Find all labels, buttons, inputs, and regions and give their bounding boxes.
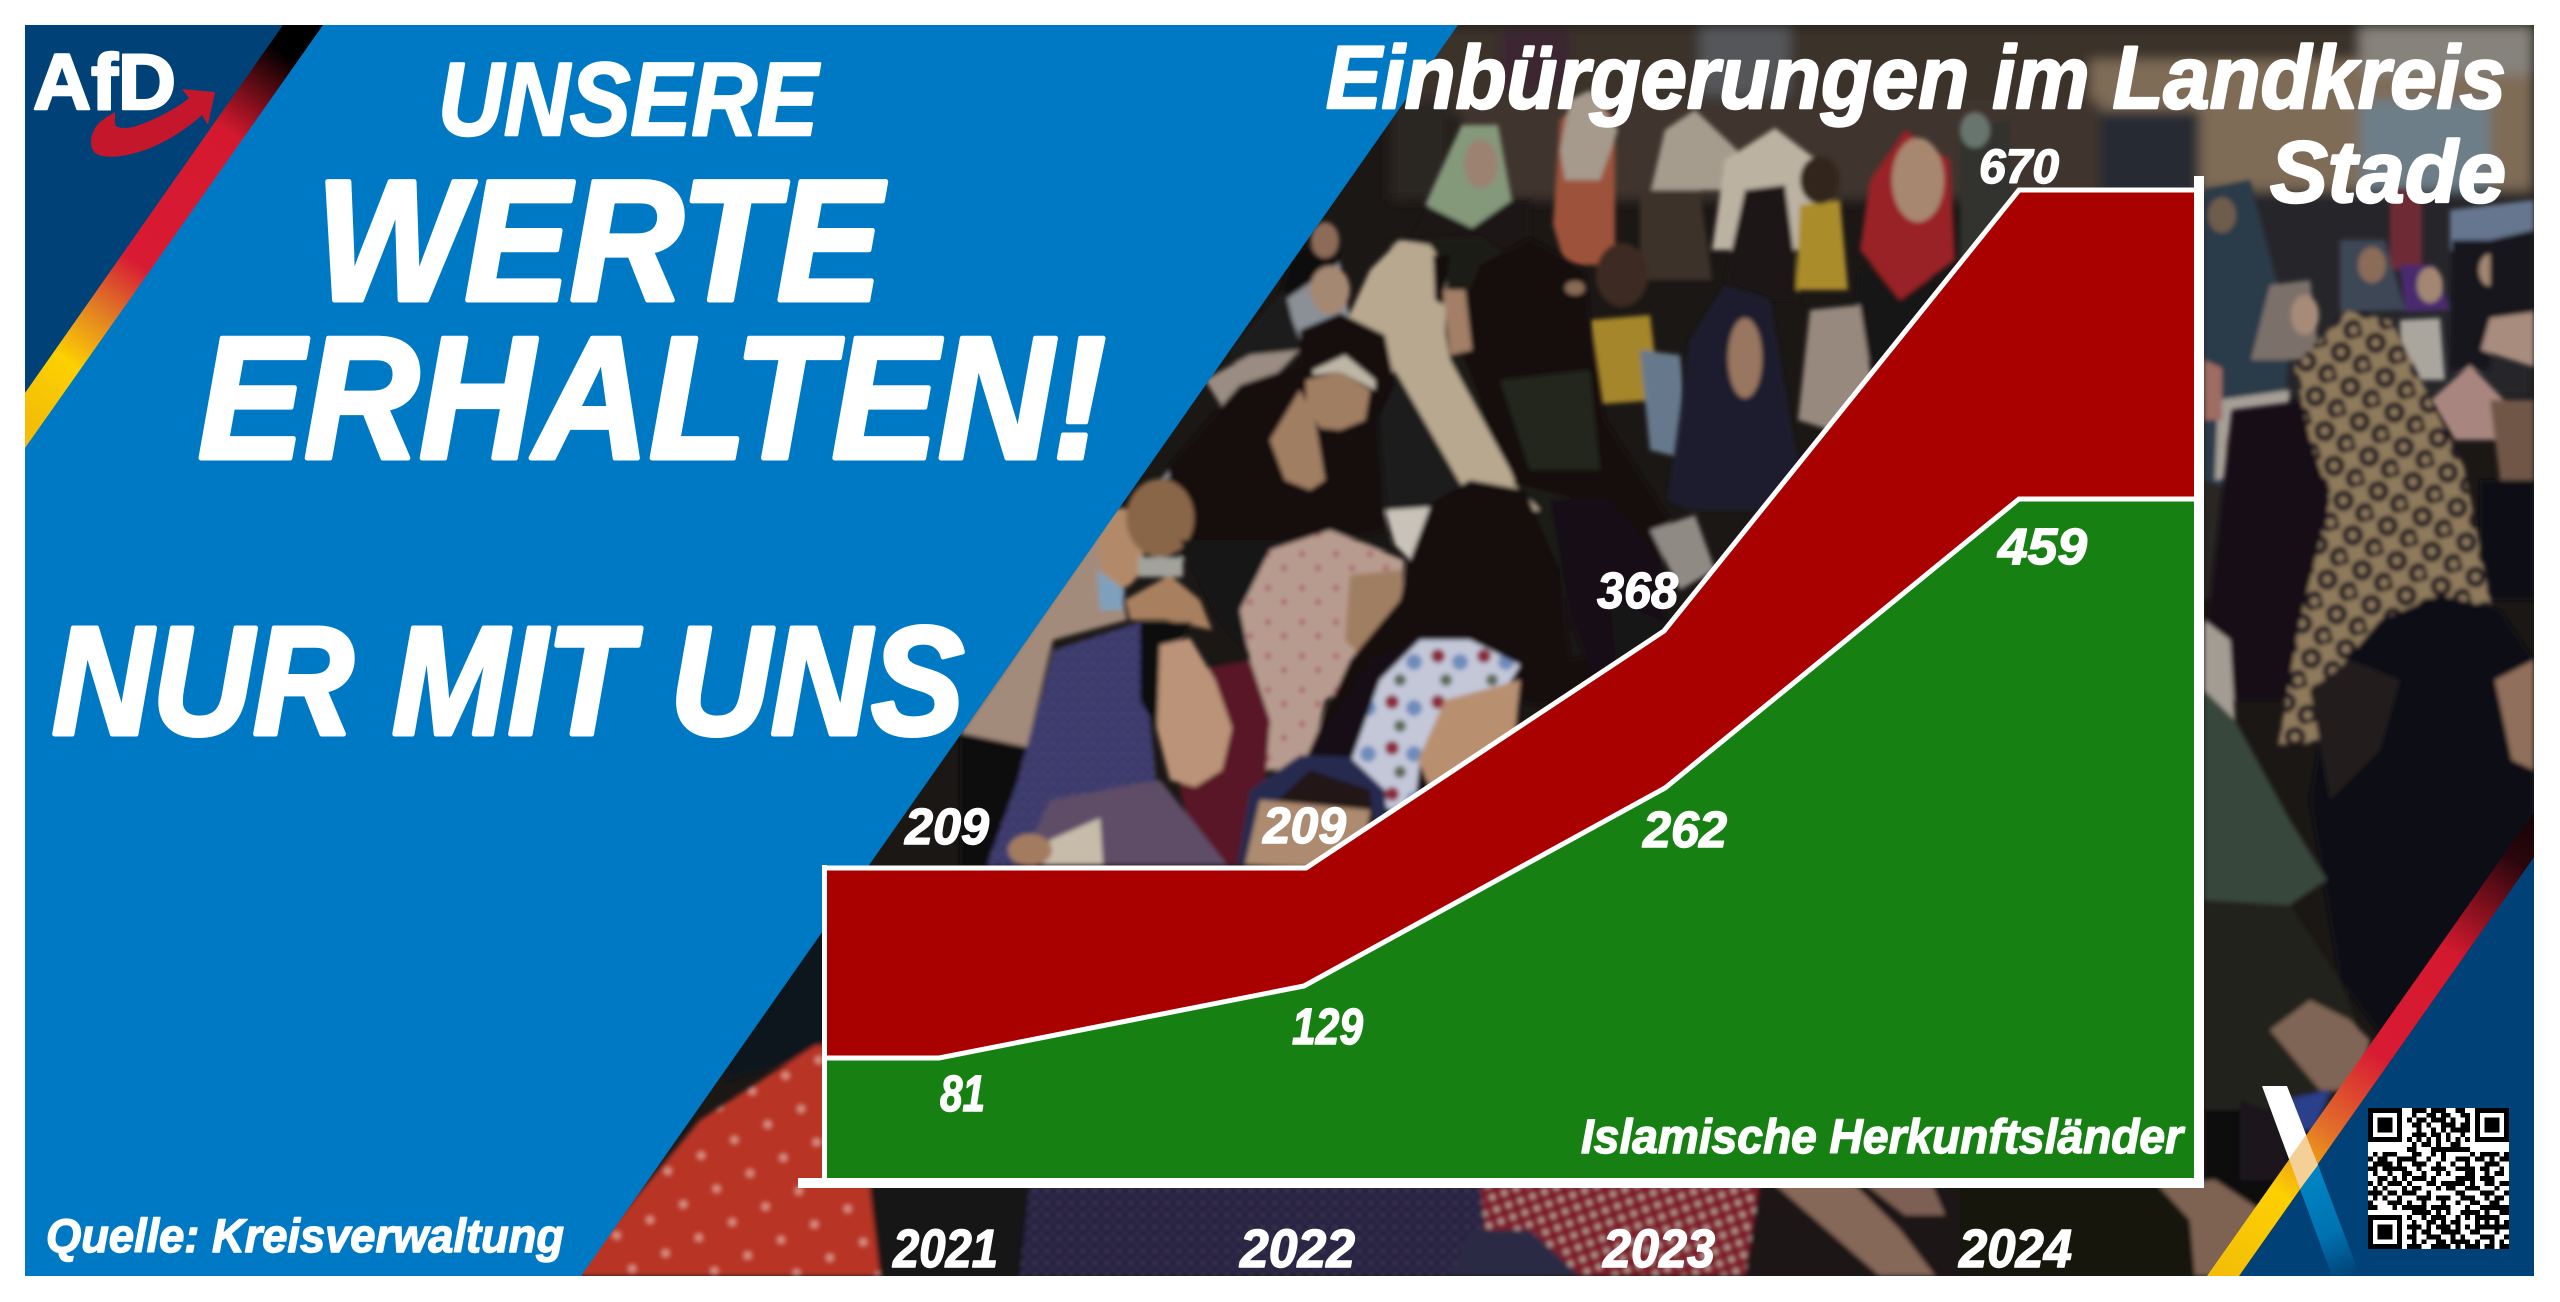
figure: beige hijab woman: [1347, 240, 1540, 530]
headline: UNSERE: UNSERE: [438, 42, 820, 158]
brand corner bottom right: flag stripe: [2207, 812, 2534, 1276]
figure: flowered hijab girl: [1305, 638, 1520, 830]
figure: black hijab woman with white cap: [1168, 313, 1395, 560]
figure: dark hijab girl: [1668, 285, 1805, 510]
legend label: Islamic countries of origin: Islamische Herkunftsländer: [1581, 1111, 2185, 1164]
chart: area chart of naturalisations: [798, 141, 2204, 1279]
value labels: Islamic countries of origin: [940, 518, 2088, 1122]
figure: leopard print hijab woman: [2204, 310, 2498, 745]
axis: right: [2194, 176, 2204, 1188]
figure: maroon sweater: [1180, 660, 1270, 865]
value labels: Islamic countries of origin: 459: [1997, 518, 2088, 575]
area: total naturalisations (red): [824, 190, 2198, 1180]
chart title: [1326, 27, 2506, 221]
figure: white scarves: [1640, 110, 1823, 300]
slogan: NUR MIT UNS: NUR MIT UNS: [52, 595, 964, 767]
chart title: Einbürgerungen im Landkreis: [1326, 27, 2506, 127]
figure: mother face and baby: [1097, 479, 1212, 630]
brand corner: flag stripe: [25, 25, 323, 448]
brand corner bottom right: navy area: [2239, 857, 2534, 1276]
figure: chair and beige: [1640, 305, 1875, 460]
axis labels: years: [892, 1219, 2072, 1279]
axis labels: years: 2024: [1958, 1219, 2072, 1279]
figure: black niqab in foreground: [1305, 480, 1715, 770]
value labels: total: 368: [1597, 562, 1679, 619]
value labels: Islamic countries of origin: 129: [1292, 998, 1364, 1055]
chart title: Stade: [2270, 124, 2506, 221]
axis: bottom: [798, 1178, 2204, 1188]
value labels: Islamic countries of origin: 81: [940, 1065, 985, 1122]
figure: red scarf girl: [1851, 112, 2015, 360]
panel: blue diagonal: [25, 25, 1458, 1276]
mid crowd: [1400, 90, 2534, 600]
figure: green scarf girl: [1400, 125, 1530, 262]
value labels: total: 209: [1262, 797, 1347, 854]
value labels: total: 670: [1979, 141, 2059, 194]
QR code: [2368, 1108, 2509, 1249]
axis labels: years: 2023: [1602, 1219, 1715, 1279]
brand corner bottom right: X stroke: [2262, 1086, 2360, 1276]
lower left: dark shadows and bag: [570, 870, 1040, 1276]
figure: maroon pattern bits: [1610, 601, 1666, 660]
source note: Quelle: Kreisverwaltung: [46, 1209, 564, 1262]
figure: orange and white dress: [1553, 90, 1618, 265]
area: Islamic countries of origin (green): [824, 499, 2198, 1180]
figure: green-grey woman: [2204, 620, 2400, 1276]
value labels: Islamic countries of origin: 262: [1642, 801, 1727, 858]
axis labels: years: 2022: [1239, 1219, 1355, 1279]
axis: left: [822, 865, 827, 1185]
figure: tan garment mother: [960, 520, 1127, 747]
foreground people: [570, 222, 2534, 1276]
photo: seated crowd: [581, 25, 2534, 1276]
value labels: total: 209: [904, 798, 990, 855]
logo: AfD: AfD: [33, 37, 176, 126]
axis labels: years: 2021: [892, 1219, 998, 1279]
logo: AfD: [34, 50, 215, 157]
figure: small girl with navy scarf: [1237, 755, 1390, 870]
figure: black hijab woman, lower right: [2310, 595, 2534, 1060]
headline: WERTE: WERTE: [316, 145, 886, 337]
figure: baby and mother in the crowd: [1160, 222, 1350, 480]
figure: niqab woman: [1453, 238, 1670, 570]
figure: yellow child: [1586, 156, 1848, 405]
line: total: [824, 190, 2198, 868]
line: Islamic countries of origin: [824, 499, 2198, 1058]
headline: ERHALTEN!: ERHALTEN!: [198, 300, 1106, 495]
figure: pink floral hijab: [1240, 530, 1404, 770]
X stroke crossing highlight: [2289, 1135, 2318, 1189]
brand corner: navy triangle: [25, 25, 284, 393]
far crowd and sand hillside: [1390, 25, 2534, 400]
value labels: total: [904, 141, 2059, 855]
figure: blue speckled hijab girl: [987, 622, 1232, 866]
bottom row: clothes and hands: [1020, 1090, 2330, 1276]
figure: dark shoulders behind: [1179, 536, 1391, 652]
